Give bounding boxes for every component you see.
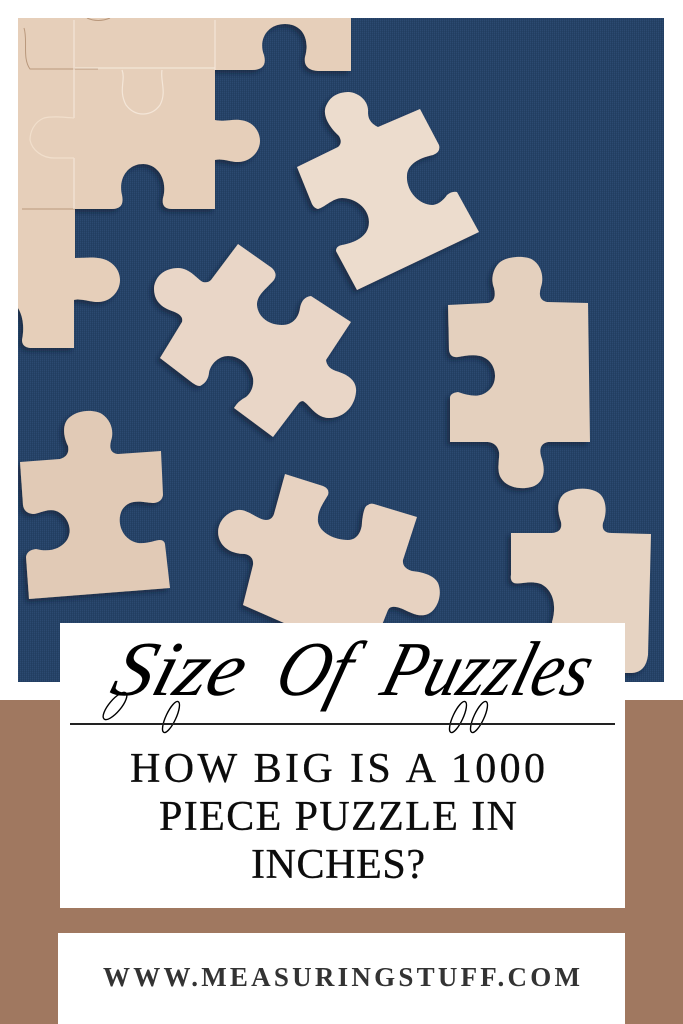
puzzle piece: right middle (448, 257, 590, 488)
puzzle piece: bottom right (511, 489, 651, 673)
website panel background (58, 933, 625, 1024)
script heading: Size (103, 626, 258, 712)
puzzle piece: centre (154, 244, 356, 437)
main heading text: PIECE PUZZLE IN (159, 794, 517, 840)
photo: wooden puzzle pieces on blue fabric (18, 18, 664, 682)
puzzle piece: bottom left (20, 411, 170, 599)
script heading: Puzzles (372, 626, 604, 712)
title panel (60, 623, 625, 908)
main heading text: INCHES? (251, 842, 425, 888)
puzzle piece: upper middle (297, 92, 479, 290)
title panel background (60, 623, 625, 908)
puzzle piece: bottom centre (218, 474, 440, 630)
website panel (58, 933, 625, 1024)
blue fabric background (18, 18, 664, 682)
main heading text (130, 746, 545, 888)
main heading text: HOW BIG IS A 1000 (130, 746, 545, 792)
website url: WWW.MEASURINGSTUFF.COM (103, 962, 580, 992)
script heading (103, 626, 604, 712)
puzzle cluster: assembled pieces top-left (18, 18, 351, 348)
script heading: Of (267, 626, 373, 712)
brown background band (0, 700, 683, 1024)
decorative flourishes under the script heading (99, 689, 491, 735)
heading underline (70, 723, 615, 725)
